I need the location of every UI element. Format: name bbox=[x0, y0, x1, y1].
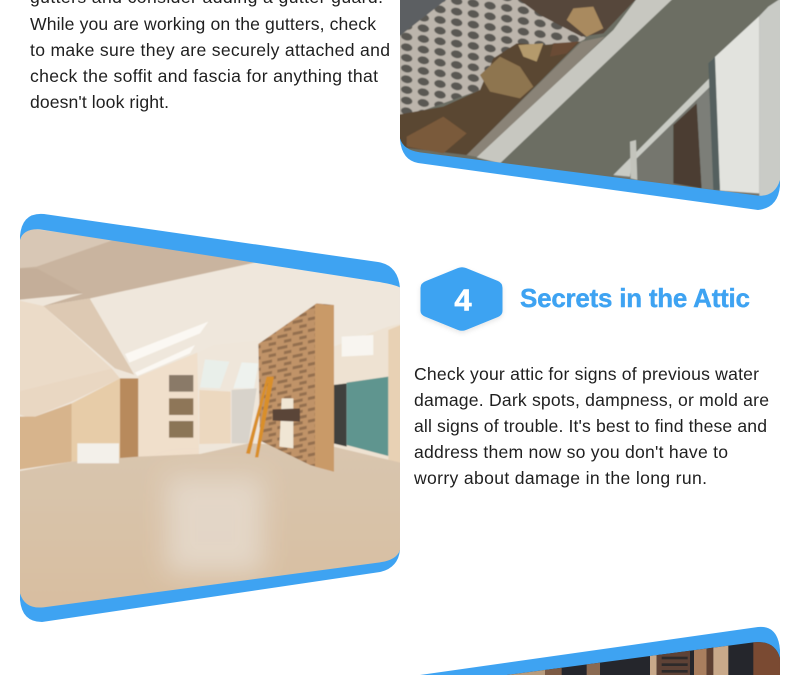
photo: leaf-filled gutter with mesh guard bbox=[397, 0, 783, 203]
number badge: hexagon 4: 4 bbox=[454, 282, 472, 318]
text block: gutters: to make sure they are securely attached and bbox=[30, 40, 390, 60]
upper ceiling bbox=[20, 230, 255, 306]
panel: next photo with blue frame bbox=[420, 627, 783, 675]
brick wall bbox=[258, 303, 334, 472]
text block: gutters: doesn't look right. bbox=[30, 92, 169, 112]
number badge: hexagon 4 bbox=[420, 267, 502, 331]
text block: attic: damage. Dark spots, dampness, or mold are bbox=[414, 390, 769, 410]
text block: attic: address them now so you don't have to bbox=[414, 442, 728, 462]
text block: attic: worry about damage in the long run. bbox=[413, 468, 707, 488]
ladder bbox=[246, 377, 274, 457]
right side bbox=[334, 326, 394, 458]
photo: building facade at dusk bbox=[507, 642, 780, 675]
photo: attic room with brick wall bbox=[17, 227, 403, 610]
text block: attic bbox=[413, 364, 769, 488]
text block: gutters: While you are working on the gutters, check bbox=[30, 14, 376, 34]
niches bbox=[169, 375, 193, 392]
text block: attic: all signs of trouble. It's best to find these and bbox=[414, 416, 767, 436]
panel: gutter photo with blue frame bbox=[397, 0, 783, 210]
skylights bbox=[200, 359, 229, 388]
text block: attic: Check your attic for signs of previous water bbox=[414, 364, 759, 384]
floor bbox=[17, 443, 403, 610]
heading: Secrets in the Attic: Secrets in the Attic bbox=[520, 283, 750, 313]
text block: gutters: check the soffit and fascia for anything that bbox=[30, 66, 378, 86]
panel: attic photo with blue frame bbox=[17, 214, 403, 622]
text block: gutters bbox=[30, 0, 390, 112]
